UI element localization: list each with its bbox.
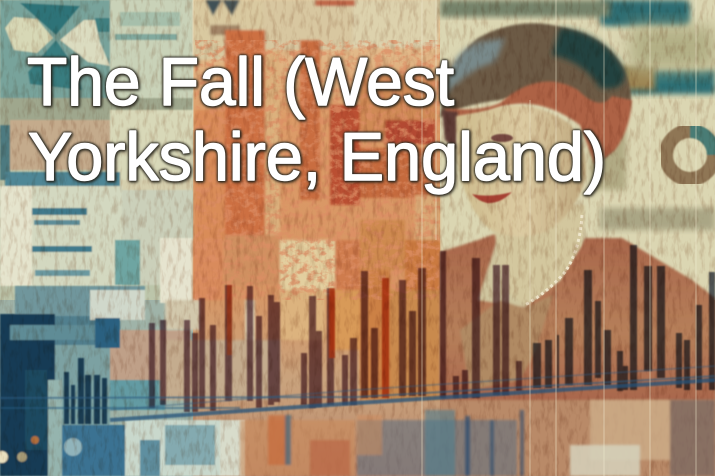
face bbox=[456, 105, 586, 237]
icon: coin ring bbox=[666, 131, 714, 179]
jacket and shoulders bbox=[440, 232, 715, 400]
neck bbox=[470, 205, 585, 305]
title line 2: Yorkshire, England) bbox=[28, 119, 606, 195]
hair: dark crown bbox=[552, 28, 625, 89]
hair bbox=[440, 23, 631, 162]
hair: grey left bbox=[445, 38, 505, 95]
illustration: portrait of woman bbox=[440, 23, 715, 400]
bar chart bbox=[64, 245, 715, 424]
lower chart reflections bbox=[240, 400, 715, 476]
red speckle texture, centre bbox=[195, 40, 440, 300]
hair: auburn curls bbox=[445, 82, 632, 165]
necklace bbox=[525, 215, 582, 305]
hair: dark lock left bbox=[442, 110, 458, 150]
eye bbox=[491, 134, 513, 142]
chart axis band bbox=[0, 366, 715, 420]
panel: banknote background with coin, right bbox=[440, 0, 715, 230]
panel: teal and dark blue block, bottom left bbox=[0, 286, 245, 476]
title line 1: The Fall (West bbox=[27, 44, 454, 120]
mouth bbox=[472, 192, 512, 203]
light vertical streaks bbox=[193, 0, 696, 476]
panel: teal banknote collage, top left bbox=[0, 0, 193, 303]
panel: orange building collage, centre bbox=[160, 0, 440, 400]
title bbox=[27, 44, 606, 195]
